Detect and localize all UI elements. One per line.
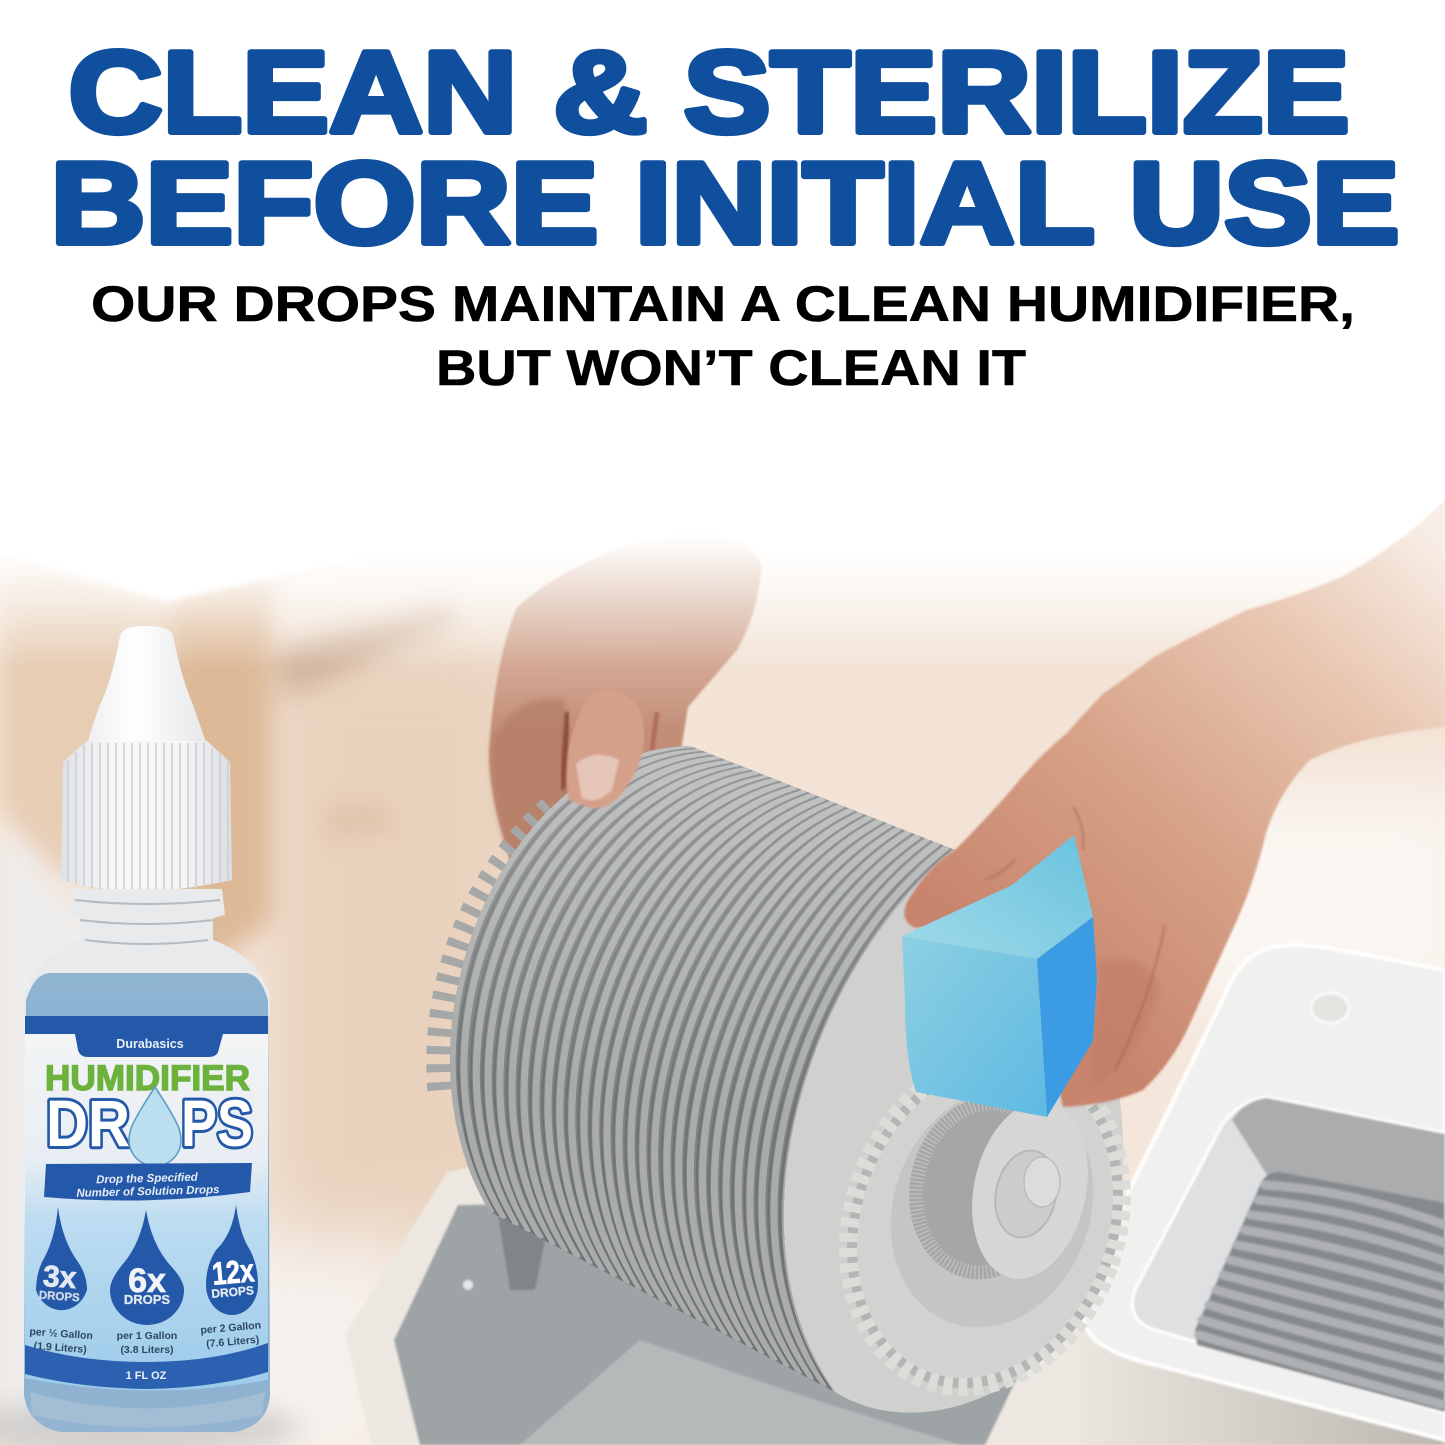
instruction banner — [44, 1163, 252, 1201]
label — [25, 1016, 268, 1391]
front end face — [784, 848, 1123, 1413]
front side of unit — [1080, 1300, 1445, 1445]
dosage captions — [29, 1319, 261, 1356]
brand name: Durabasics — [116, 1037, 184, 1051]
gear wheel — [804, 1019, 1166, 1425]
right hand and arm — [904, 500, 1445, 1107]
sponge top — [902, 835, 1093, 959]
main title: BEFORE INITIAL USE — [50, 138, 1400, 268]
water tray — [345, 1100, 1085, 1445]
product name green: HUMIDIFIER — [45, 1059, 250, 1098]
brand band — [25, 1016, 268, 1057]
subtitle: BUT WON’T CLEAN IT — [436, 340, 1026, 396]
dosage drop: 6x: DROPS — [124, 1292, 170, 1307]
vent — [1195, 1172, 1445, 1412]
dosage captions: (1.9 Liters) — [33, 1340, 87, 1356]
product name drops: PS — [181, 1086, 253, 1160]
dosage captions: per ½ Gallon — [29, 1326, 93, 1342]
top white fade — [0, 200, 1445, 601]
index finger over drum — [567, 690, 644, 809]
bottom volume band — [25, 1343, 268, 1389]
banner text — [76, 1172, 220, 1200]
vent slats — [1199, 1185, 1445, 1405]
banner text: Number of Solution Drops — [76, 1184, 220, 1200]
volume text: 1 FL OZ — [126, 1370, 167, 1382]
ribbed cap — [61, 741, 232, 891]
dosage captions: (3.8 Liters) — [120, 1344, 174, 1356]
product name drops: DR — [46, 1086, 130, 1160]
dosage captions: per 1 Gallon — [117, 1330, 177, 1342]
unit top rim — [1080, 945, 1445, 1440]
humidifier base unit — [1080, 945, 1445, 1445]
blue sponge — [902, 835, 1097, 1117]
clear shoulder — [24, 889, 270, 1016]
subtitle — [91, 276, 1355, 396]
hero water drop — [129, 1087, 181, 1166]
dosage drop: 3x: DROPS — [38, 1290, 80, 1304]
ribbed body — [430, 690, 970, 1393]
banner text: Drop the Specified — [96, 1172, 199, 1186]
recess — [1132, 1097, 1445, 1413]
dosage captions: per 2 Gallon — [200, 1319, 261, 1337]
product bottle — [0, 626, 300, 1445]
subtitle: OUR DROPS MAINTAIN A CLEAN HUMIDIFIER, — [91, 276, 1355, 332]
sponge side — [1037, 917, 1097, 1117]
dosage drop: 6x — [110, 1210, 184, 1325]
main title — [50, 27, 1400, 268]
recess far wall — [1232, 1098, 1445, 1205]
back gear teeth — [438, 808, 550, 1098]
dosage drop: 12x — [206, 1205, 258, 1315]
left hand — [489, 533, 762, 880]
sponge front — [902, 936, 1047, 1117]
unit button — [1311, 993, 1349, 1023]
floor shadow — [0, 1398, 300, 1445]
humidifier filter drum — [430, 690, 1166, 1425]
dosage drop: 12x: 12x — [211, 1252, 256, 1292]
dosage drop: 12x: DROPS — [211, 1283, 255, 1301]
main title: CLEAN & STERILIZE — [68, 27, 1350, 157]
glass neck and body — [24, 889, 270, 1432]
product name drops — [46, 1086, 253, 1160]
dosage drop: 6x: 6x — [128, 1262, 166, 1300]
dosage drop: 3x: 3x — [42, 1260, 78, 1295]
bottle cap tip — [87, 626, 207, 745]
dosage drop: 3x — [36, 1207, 87, 1310]
dosage captions: (7.6 Liters) — [206, 1334, 260, 1350]
